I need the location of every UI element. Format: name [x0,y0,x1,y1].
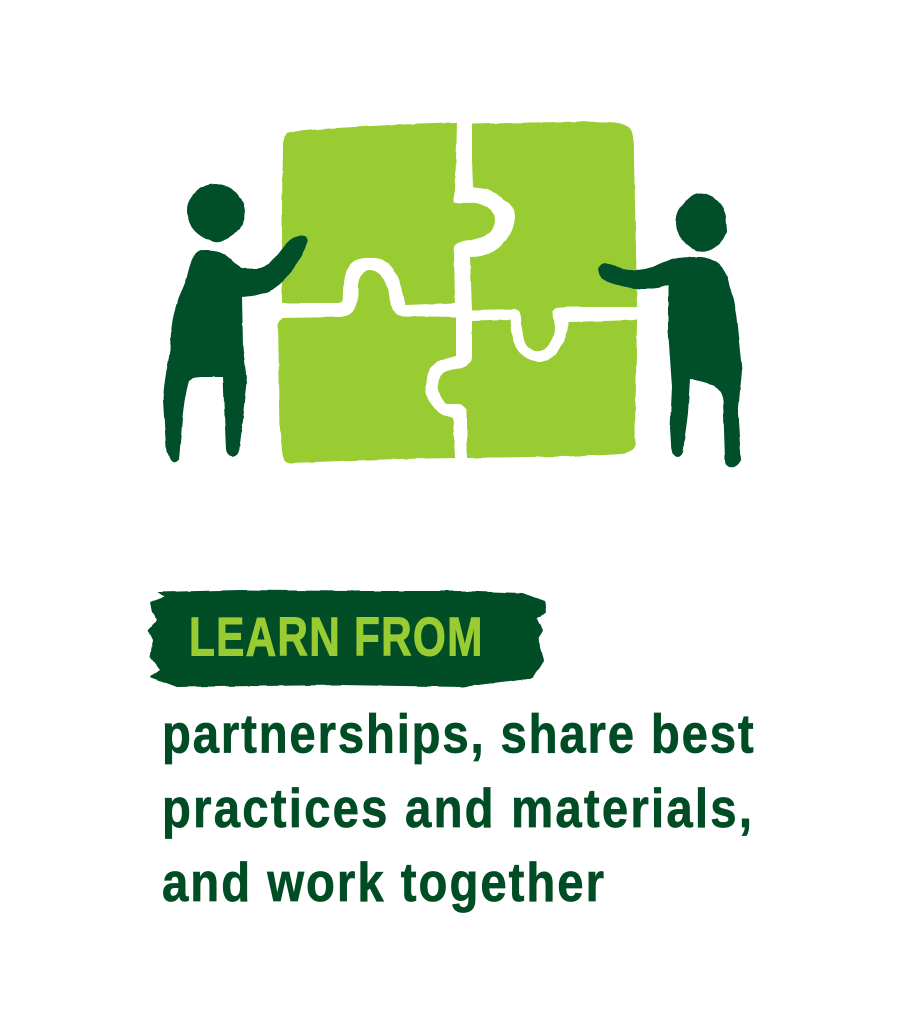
line 2: practices and materials, [162,778,752,839]
line 3: and work together [162,852,604,913]
line 1: partnerships, share best [162,703,754,764]
body and raised arm [163,236,308,462]
puzzle piece: bottom left [278,270,456,463]
person: right [599,193,742,467]
body text [162,703,754,913]
puzzle piece: bottom right [438,320,637,458]
head [187,184,245,242]
illustration: two people holding a puzzle [163,122,742,467]
puzzle piece: top right [470,122,637,351]
puzzle piece: top left [282,123,495,305]
label banner: LEARN FROM [148,590,546,687]
head [676,193,727,252]
puzzle: four interlocking green pieces [278,122,637,463]
person: left [163,184,308,462]
body and raised arm [599,257,742,467]
brush stroke background [148,590,546,687]
banner text: LEARN FROM [189,607,482,668]
